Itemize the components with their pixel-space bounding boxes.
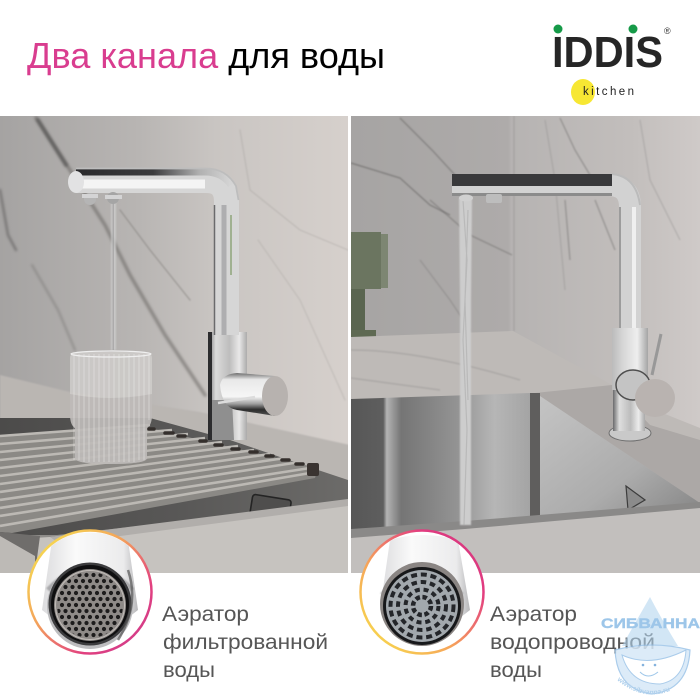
water stream	[459, 198, 472, 525]
marble veins	[0, 118, 348, 400]
front counter	[37, 506, 348, 573]
watermark: Sibvanna: www.sibvanna.ru	[618, 677, 670, 694]
counter	[351, 331, 700, 502]
photo base fill	[30, 526, 132, 538]
panel: left photo, filtered water faucet	[0, 116, 350, 573]
ribbed base	[212, 400, 234, 440]
water stream	[111, 200, 116, 350]
faucet	[68, 168, 288, 440]
faucet	[452, 174, 675, 441]
sink basin	[0, 418, 348, 535]
text: filtered water aerator label: Аэратор	[162, 603, 249, 626]
panel: right photo, tap water faucet	[351, 116, 700, 573]
watermark: Sibvanna: СИБВАННА	[601, 615, 700, 631]
front counter	[351, 530, 700, 573]
callout: filtered water aerator	[28, 530, 152, 654]
sink drain badge	[250, 494, 292, 512]
marble veins	[351, 118, 680, 330]
watermark: Sibvanna	[601, 597, 700, 695]
text: tap water aerator label: воды	[490, 659, 542, 682]
spout and riser	[76, 180, 226, 335]
column base	[212, 332, 247, 440]
wall corner shadow	[513, 116, 515, 331]
faucet handle	[616, 370, 675, 417]
text: tap water aerator label: водопроводной	[490, 631, 655, 654]
logo: IDDIS kitchen: kitchen	[583, 86, 634, 98]
drain mark	[626, 486, 645, 510]
text: filtered water aerator label: фильтрованной	[163, 631, 328, 654]
column and foot	[609, 425, 651, 441]
green object	[351, 232, 388, 348]
spout and riser	[452, 185, 630, 330]
callout: tap water aerator	[360, 530, 484, 654]
logo: IDDIS kitchen: IDDIS	[552, 28, 663, 77]
marble wall	[0, 116, 348, 456]
text: tap water aerator label	[490, 603, 655, 682]
counter behind sink	[0, 375, 348, 480]
logo: IDDIS kitchen: ®	[664, 26, 671, 36]
drying rack	[0, 425, 319, 533]
text: filtered water aerator label: воды	[163, 659, 215, 682]
logo: IDDIS kitchen	[552, 24, 671, 105]
text: tap water aerator label: Аэратор	[490, 603, 577, 626]
glass	[70, 351, 152, 464]
title: Два канала для воды	[27, 35, 385, 76]
text: filtered water aerator label	[162, 603, 328, 682]
faucet handle	[218, 373, 288, 416]
marble wall	[351, 116, 700, 446]
sink basin	[351, 393, 530, 535]
